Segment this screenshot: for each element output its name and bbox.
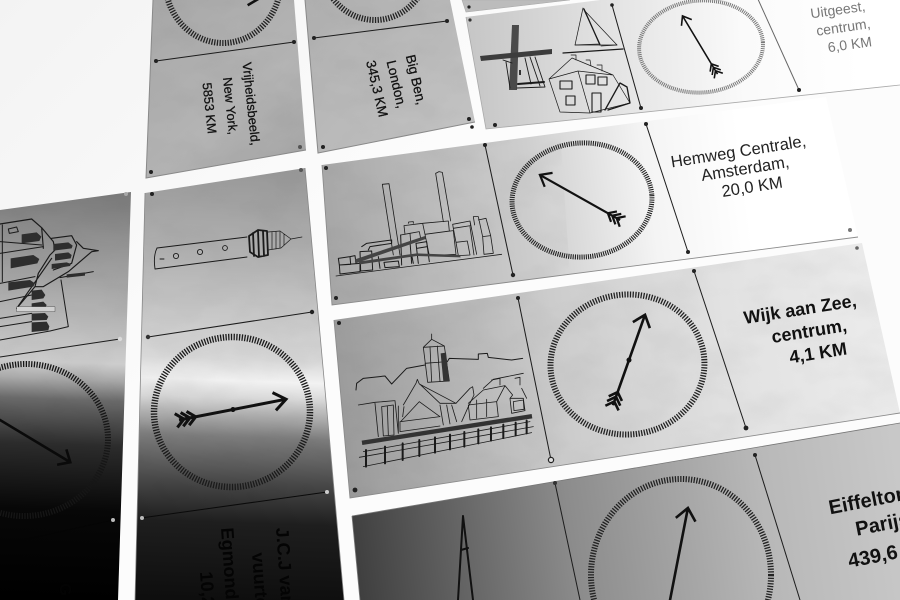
panel: Hemweg Centrale, Amsterdam [322, 97, 858, 305]
text: Wijk aan Zee label: 4,1 KM [788, 339, 848, 367]
text: Big Ben label: 345,3 KM [363, 59, 391, 119]
icon: windmill [480, 25, 552, 90]
icon: lighthouse [154, 230, 302, 269]
arrow: lighthouse direction [174, 390, 288, 429]
text: Wijk aan Zee label: Wijk aan Zee, [742, 290, 858, 328]
panel: Wijk aan Zee, centrum [334, 243, 900, 498]
panel: church, left column [0, 192, 131, 600]
text: Wijk aan Zee label: centrum, [770, 315, 848, 347]
icon: sailboat [563, 8, 623, 53]
text: Big Ben label: London, [384, 59, 409, 110]
text: dark plaque label: G [55, 583, 73, 597]
icon: village with church tower [356, 334, 533, 467]
text: Hemweg label: 20,0 KM [720, 174, 784, 201]
icon: dutch house [549, 55, 630, 113]
text: Vrijheidsbeeld label: New York, [220, 77, 241, 135]
text: Uitgeest label: centrum, [815, 15, 871, 39]
text: Big Ben label: Big Ben, [403, 53, 429, 106]
panel: sliver of plaque at top edge [462, 0, 570, 12]
text: Uitgeest label: 6,0 KM [827, 33, 873, 55]
arrow: Eiffel direction [658, 506, 698, 600]
metal mottling texture [172, 296, 870, 387]
panel: Eiffeltoren, Parijs [352, 423, 900, 600]
arrow: Hemweg direction [536, 168, 627, 229]
arrow: left plaque direction [0, 405, 75, 470]
arrow: Uitgeest direction [677, 13, 724, 79]
text: Vrijheidsbeeld label: 5853 KM [199, 82, 220, 134]
icon: church [0, 219, 98, 340]
text: J.C.J van Speijk label [196, 527, 302, 600]
icon: power station [336, 172, 502, 276]
arrow: Wijk aan Zee direction [603, 312, 654, 411]
icon: Eiffel tower top [458, 516, 473, 600]
text: Hemweg label: Hemweg Centrale, [670, 132, 807, 171]
panel: Vrijheidsbeeld, New York [146, 0, 306, 178]
panel: Uitgeest, centrum [466, 0, 900, 129]
panel: lighthouse, Egmond [135, 168, 344, 600]
text: Vrijheidsbeeld label: Vrijheidsbeeld, [240, 61, 263, 146]
panel: Big Ben, London [305, 0, 475, 153]
text: Hemweg label: Amsterdam, [700, 153, 791, 185]
